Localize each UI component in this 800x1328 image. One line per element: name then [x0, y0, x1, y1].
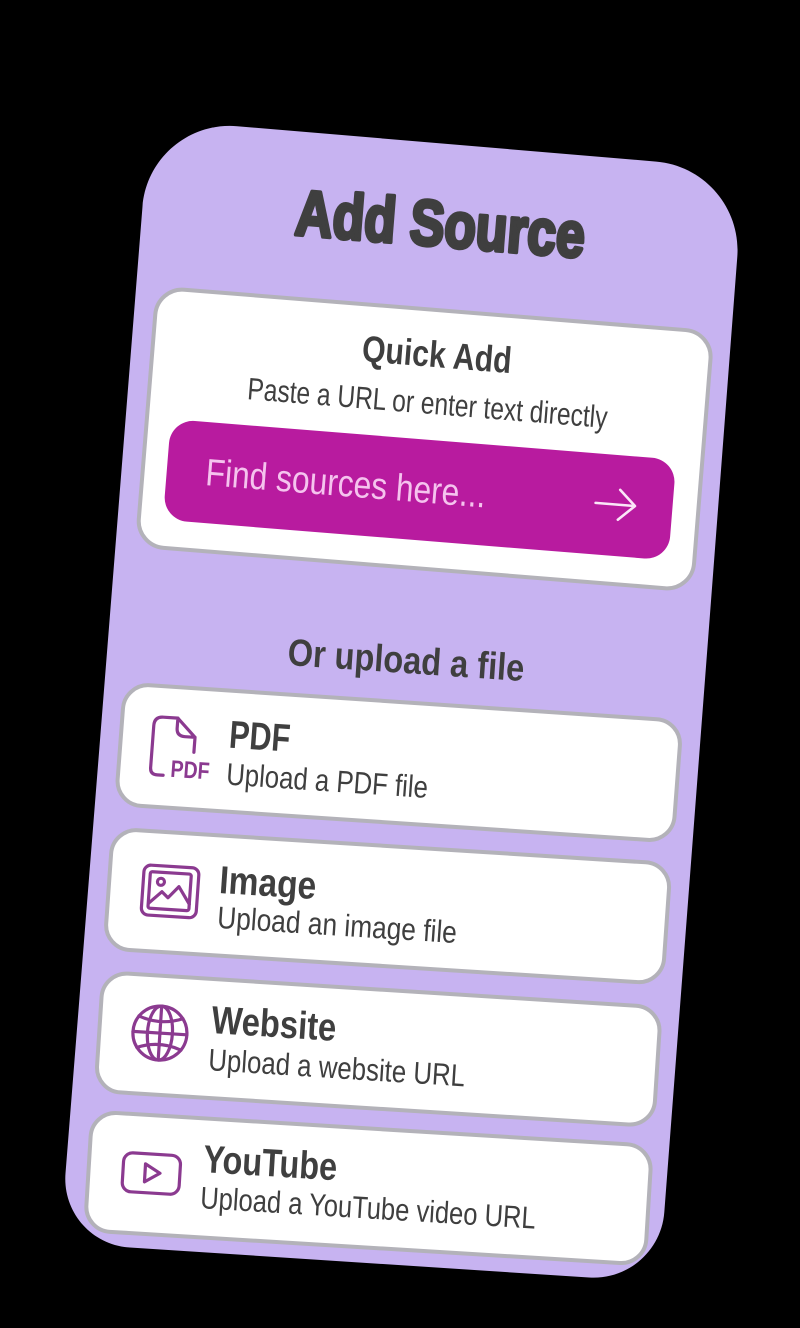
image title: Image — [218, 859, 318, 908]
website title: Website — [210, 999, 338, 1050]
icon: pdf: PDF — [170, 756, 210, 785]
pdf title: PDF — [228, 714, 292, 761]
input placeholder: Find sources here... — [204, 452, 488, 516]
heading: quick add: Quick Add — [361, 328, 513, 381]
title: Add Source — [293, 177, 588, 272]
icon: arrow — [594, 488, 636, 521]
icon: image — [141, 865, 199, 918]
search input — [163, 419, 676, 560]
image description: Upload an image file — [216, 900, 458, 950]
text: quick add description: Paste a URL or enter text directly — [246, 371, 609, 435]
website description: Upload a website URL — [207, 1042, 466, 1093]
icon: globe — [131, 1004, 189, 1062]
youtube description: Upload a YouTube video URL — [199, 1180, 537, 1236]
panel: quick add — [137, 288, 713, 590]
phone panel — [65, 126, 738, 1278]
pdf description: Upload a PDF file — [225, 757, 429, 805]
icon: pdf — [150, 717, 213, 785]
row: website — [95, 972, 661, 1126]
row: image — [104, 829, 671, 984]
row: pdf — [116, 684, 682, 842]
heading: or upload a file: Or upload a file — [286, 632, 526, 690]
row: youtube — [85, 1112, 652, 1265]
youtube title: YouTube — [202, 1138, 338, 1189]
icon: youtube — [122, 1152, 181, 1195]
